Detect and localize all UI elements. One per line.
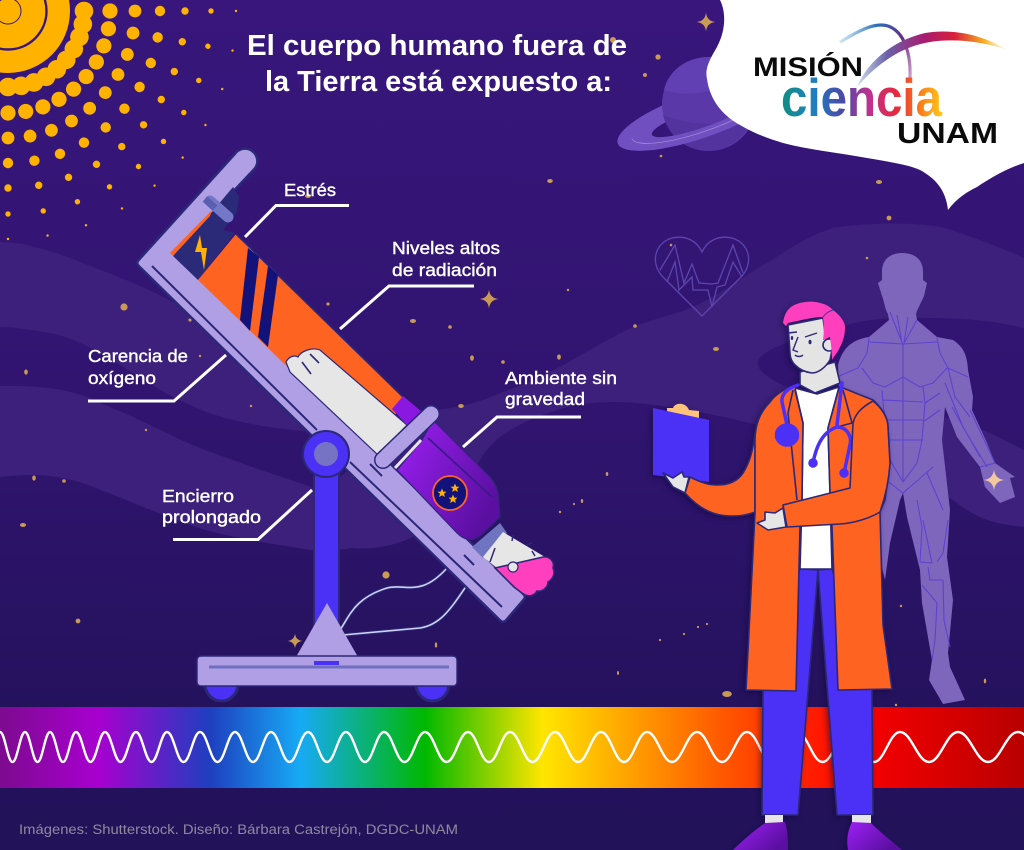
label: Ambiente sin gravedad (463, 368, 617, 447)
credits: Imágenes: Shutterstock. Diseño: Bárbara Castrejón, DGDC-UNAM (19, 822, 458, 837)
label: Encierro prolongado: prolongado (162, 507, 261, 527)
label: Encierro prolongado: Encierro (162, 486, 234, 506)
label: Niveles altos de radiación: Niveles altos (392, 238, 500, 258)
stethoscope (776, 383, 850, 476)
star on hand (984, 470, 1004, 490)
human muscular body (837, 253, 1015, 704)
title: la Tierra está expuesto a: (265, 66, 612, 98)
purple suit (383, 396, 500, 540)
logo: Misión Ciencia UNAM: ciencia (781, 69, 942, 128)
coat (685, 385, 892, 691)
stars and dust (20, 12, 986, 706)
shirt and neck (795, 362, 840, 569)
stand column (314, 470, 339, 645)
doctor (653, 302, 902, 850)
label: Carencia de oxígeno: oxígeno (88, 368, 156, 388)
logo: Misión Ciencia UNAM (753, 25, 1007, 150)
label: Niveles altos de radiación: de radiación (392, 260, 497, 280)
base (197, 603, 457, 686)
wheels (205, 684, 449, 701)
legs (762, 569, 873, 815)
label: Carencia de oxígeno: Carencia de (88, 346, 188, 366)
icon: saturn (617, 56, 748, 151)
stretcher machine (141, 152, 554, 701)
logo: Misión Ciencia UNAM: MISIÓN (753, 51, 863, 82)
label: Carencia de oxígeno (88, 346, 226, 401)
clipboard (653, 404, 709, 482)
label: Estrés (245, 180, 349, 237)
rail (141, 152, 521, 618)
patient blanket (286, 349, 407, 455)
label: Encierro prolongado (162, 486, 312, 540)
hand with clipboard (663, 472, 689, 493)
capsule head section (170, 187, 239, 280)
spectrum band with wave (0, 707, 1024, 788)
background waves (0, 224, 1024, 550)
label: Ambiente sin gravedad: Ambiente sin (505, 368, 617, 388)
label: Ambiente sin gravedad: gravedad (505, 389, 585, 409)
logo bubble (706, 0, 1024, 210)
label: Niveles altos de radiación (340, 238, 500, 329)
orange capsule body (198, 234, 403, 455)
label: Estrés: Estrés (284, 180, 336, 200)
icon: heart with pulse (655, 237, 749, 316)
patient head (472, 523, 554, 596)
title (247, 30, 627, 98)
pivot joint (303, 431, 349, 477)
logo: Misión Ciencia UNAM: UNAM (897, 118, 998, 150)
icon: sun (0, 0, 237, 240)
head (783, 302, 845, 373)
mission badge (433, 476, 467, 510)
hand and sleeve (757, 401, 890, 530)
title: El cuerpo humano fuera de (247, 30, 627, 62)
cables (340, 568, 467, 635)
shoes (733, 815, 902, 850)
